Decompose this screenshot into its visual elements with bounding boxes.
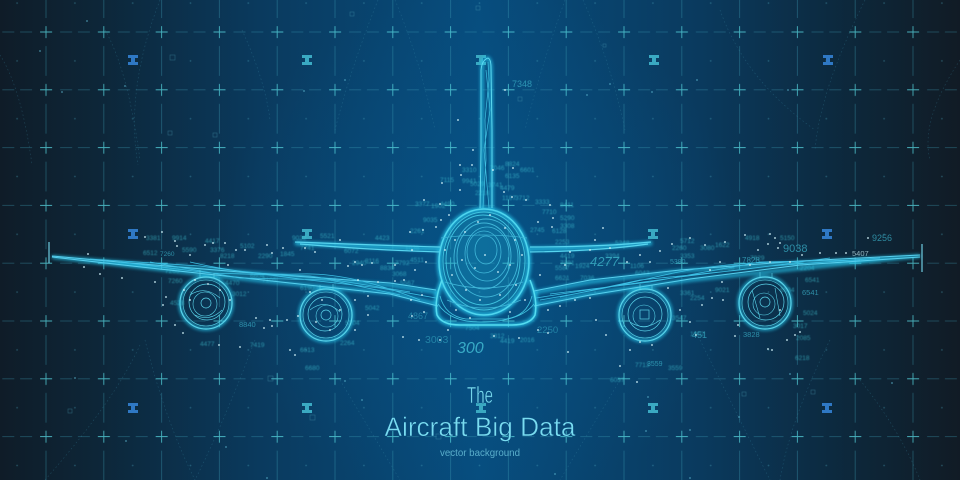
data number cloud: 5029 [470, 181, 485, 188]
data number cloud: 7829 [750, 255, 765, 262]
large data numbers: 4867 [408, 311, 428, 321]
data number cloud: 3394 [605, 253, 620, 260]
large data numbers: 451 [692, 330, 707, 340]
data number cloud: 2261 [410, 228, 425, 235]
data number cloud: 7260 [165, 268, 180, 275]
data number cloud: 4477 [200, 341, 215, 348]
data number cloud: 4419 [500, 338, 515, 345]
data number cloud: 3377 [415, 201, 430, 208]
large data numbers: 2250 [537, 325, 558, 336]
data number cloud: 8411 [560, 202, 574, 209]
data number cloud: 6135 [505, 173, 520, 180]
data number cloud: 5150 [780, 235, 795, 242]
data number cloud: 5712 [680, 238, 695, 245]
icon markers [128, 55, 833, 413]
data number cloud: 1622 [715, 242, 730, 249]
large data numbers: 5380 [670, 259, 686, 266]
glow under aircraft [52, 58, 920, 341]
data number cloud: 5036 [720, 265, 735, 272]
data number cloud: 7046 [490, 165, 505, 172]
data number cloud: 6057 [610, 377, 625, 384]
subtitle: vector background [440, 447, 520, 459]
tail fin [480, 58, 492, 208]
data number cloud: 7504 [465, 325, 480, 332]
data number cloud: 4419 [560, 253, 575, 260]
large data numbers: 300 [457, 340, 484, 357]
data number cloud: 3376 [210, 247, 225, 254]
icon: marker row top [128, 55, 833, 65]
large data numbers: 7348 [512, 79, 532, 89]
icon: marker row bottom [128, 403, 832, 413]
data number cloud: 3812 [490, 333, 505, 340]
right wing [534, 244, 922, 306]
data number cloud: 3333 [535, 199, 550, 206]
data number cloud: 6541 [805, 277, 820, 284]
data number cloud: 8830 [380, 265, 395, 272]
data number cloud: 7710 [542, 209, 557, 216]
data number cloud: 7105 [262, 277, 277, 284]
large data numbers: 6541 [802, 288, 819, 297]
aircraft [49, 58, 922, 341]
data number cloud: 6534 [780, 287, 795, 294]
data number cloud: 3308 [560, 223, 575, 230]
data number cloud: 4511 [410, 257, 424, 264]
data number cloud: 5587 [555, 265, 570, 272]
data number cloud: 6190 [300, 285, 315, 292]
data number cloud: 9941 [462, 178, 477, 185]
data number cloud: 1902 [690, 331, 705, 338]
data number cloud: 3012 [232, 291, 247, 298]
data number cloud: 2290 [258, 253, 273, 260]
data number cloud: 5290 [560, 215, 575, 222]
data number cloud: 8218 [220, 253, 235, 260]
data number cloud: 4479 [500, 185, 515, 192]
data number cloud: 4423 [375, 235, 390, 242]
engine: left inner [300, 284, 352, 341]
data number cloud: 7291 [560, 260, 575, 267]
data number cloud: 1924 [575, 263, 590, 270]
data number cloud: 5567 [400, 280, 415, 287]
title: The: The [467, 382, 493, 408]
title block [384, 382, 576, 459]
data number cloud: 3310 [462, 167, 477, 174]
data number cloud: 6128 [552, 228, 567, 235]
data number cloud: 7419 [250, 342, 265, 349]
data number cloud: 5590 [182, 247, 197, 254]
data number cloud: 2016 [520, 337, 535, 344]
engine: left outer [180, 270, 232, 329]
large data numbers: 8840 [239, 320, 256, 329]
fuselage [439, 209, 529, 315]
large data numbers: 3828 [743, 330, 760, 339]
data number cloud: 9914 [172, 235, 187, 242]
data number cloud: 8116 [365, 258, 379, 265]
icon: marker row middle [128, 229, 832, 239]
data number cloud: 3741 [488, 182, 503, 189]
data number cloud: 3361 [680, 290, 695, 297]
data number cloud: 5204 [345, 320, 360, 327]
data number cloud: 4918 [745, 235, 760, 242]
data number cloud: 2745 [530, 227, 545, 234]
data number cloud: 2253 [555, 239, 570, 246]
data number cloud: 5042 [365, 305, 380, 312]
data number cloud: 1902 [431, 203, 446, 210]
data number cloud: 3080 [700, 245, 715, 252]
data number cloud: 3017 [793, 323, 808, 330]
large data numbers: 9038 [783, 243, 807, 255]
data number cloud: 7792 [395, 260, 410, 267]
data number cloud: 2940 [352, 260, 367, 267]
data number cloud: 6218 [795, 355, 810, 362]
data number cloud: 2254 [690, 295, 705, 302]
engine: right inner [619, 284, 671, 341]
data number cloud: 6043 [635, 270, 650, 277]
data number cloud: 7741 [300, 245, 315, 252]
data number cloud: 1038 [405, 245, 420, 252]
data number cloud: 7115 [440, 177, 454, 184]
data number cloud: 3712 [515, 195, 530, 202]
large data numbers: 3559 [647, 361, 663, 368]
data number cloud: 7260 [168, 278, 183, 285]
large data numbers: 7260 [160, 251, 175, 258]
data number cloud: 9032 [292, 235, 307, 242]
title: Aircraft Big Data: Aircraft Big Data [384, 412, 576, 442]
data number cloud: 9021 [715, 287, 730, 294]
data number cloud: 8824 [505, 161, 520, 168]
data number cloud: 3353 [680, 253, 695, 260]
data number cloud: 6680 [305, 365, 320, 372]
data number cloud: 1845 [280, 251, 295, 258]
data number cloud: 4417 [205, 238, 220, 245]
large data numbers [160, 79, 892, 368]
belly fairing [436, 280, 536, 325]
data number cloud: 5521 [320, 233, 335, 240]
left wing [49, 242, 438, 306]
data number cloud: 2085 [796, 335, 811, 342]
data number cloud [143, 161, 820, 384]
data number cloud: 5248 [615, 240, 630, 247]
data number cloud: 7713 [635, 362, 650, 369]
large data numbers: 3003 [425, 334, 449, 346]
engine: right outer [739, 272, 791, 329]
data number cloud: 7036 [580, 275, 595, 282]
data number cloud: 4490 [440, 201, 455, 208]
data number cloud: 6601 [520, 167, 535, 174]
large data numbers: 5407 [852, 249, 869, 258]
horizontal stabilizers [295, 242, 651, 252]
data number cloud: 2204 [800, 265, 815, 272]
data number cloud: 5024 [803, 310, 818, 317]
data number cloud: 6072 [344, 248, 359, 255]
data number cloud: 4470 [225, 280, 240, 287]
data number cloud: 2264 [340, 340, 355, 347]
data number cloud: 4528 [170, 300, 185, 307]
data point particles [84, 90, 868, 382]
data number cloud: 1106 [630, 263, 644, 270]
data number cloud: 3068 [392, 271, 407, 278]
data number cloud: 3559 [668, 365, 683, 372]
data number cloud: 2218 [475, 190, 490, 197]
large data numbers: 7828 [742, 256, 760, 265]
data number cloud: 1187 [502, 195, 516, 202]
data number cloud: 6613 [300, 347, 315, 354]
data number cloud: 3381 [146, 235, 161, 242]
data number cloud: 6512 [143, 250, 158, 257]
small square markers [68, 6, 815, 439]
data number cloud: 2260 [672, 245, 687, 252]
data number cloud: 5102 [240, 243, 255, 250]
large data numbers: 4277 [590, 254, 620, 269]
large data numbers: 9256 [872, 233, 892, 243]
data number cloud: 6604 [250, 273, 265, 280]
data number cloud: 9035 [423, 217, 438, 224]
data number cloud: 6621 [555, 275, 570, 282]
data number cloud: 3547 [672, 315, 687, 322]
